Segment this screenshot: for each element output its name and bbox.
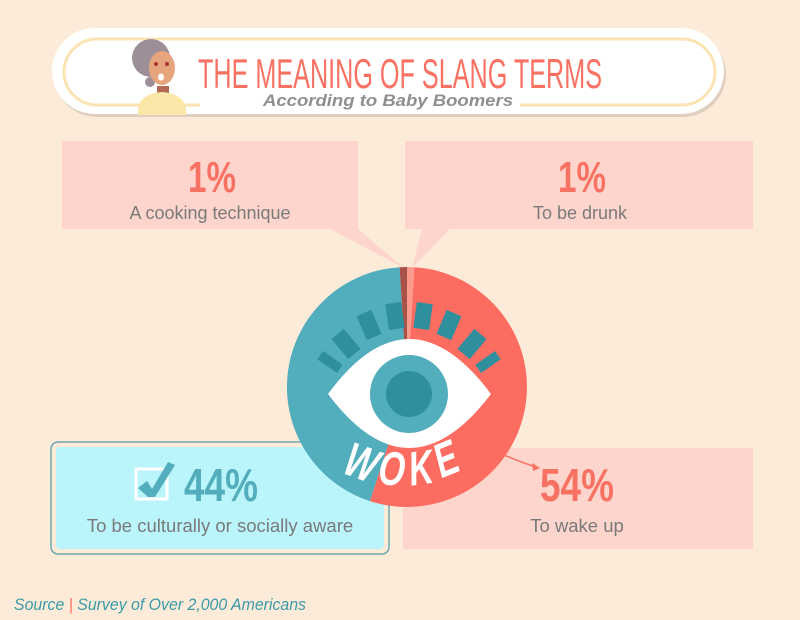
subtitle: According to Baby Boomers: [262, 91, 513, 110]
label: WOKE: K: [405, 438, 439, 496]
icon: checkbox: [136, 462, 175, 499]
callout pointer right: [412, 229, 450, 268]
header banner: [52, 28, 726, 117]
icon: grandmother: [132, 39, 186, 115]
icon: eye: [328, 339, 491, 448]
panel: culturally aware: [51, 442, 389, 554]
pie chart: [287, 267, 527, 507]
icon: eyelashes: [317, 302, 501, 373]
label: WOKE: O: [376, 440, 408, 497]
source: Source | Survey of Over 2,000 Americans: [14, 595, 306, 614]
arrow: [497, 452, 540, 471]
label: WOKE: E: [425, 429, 467, 488]
panel: cooking technique: 1%: [188, 153, 236, 202]
panel: culturally aware: To be culturally or socially aware: [87, 515, 353, 536]
panel: to wake up: 54%: [540, 459, 614, 511]
panel: cooking technique: A cooking technique: [129, 203, 291, 223]
panel: to wake up: To wake up: [530, 515, 624, 536]
panel: to be drunk: To be drunk: [533, 203, 628, 223]
label: WOKE: W: [338, 431, 389, 494]
panel: cooking technique: [62, 141, 358, 229]
panel: to be drunk: [405, 141, 753, 229]
label: WOKE: [338, 429, 467, 497]
panel: to be drunk: 1%: [558, 153, 606, 202]
panel: culturally aware: 44%: [184, 459, 258, 511]
panel: to wake up: [403, 448, 753, 549]
callout pointer left: [330, 229, 404, 268]
